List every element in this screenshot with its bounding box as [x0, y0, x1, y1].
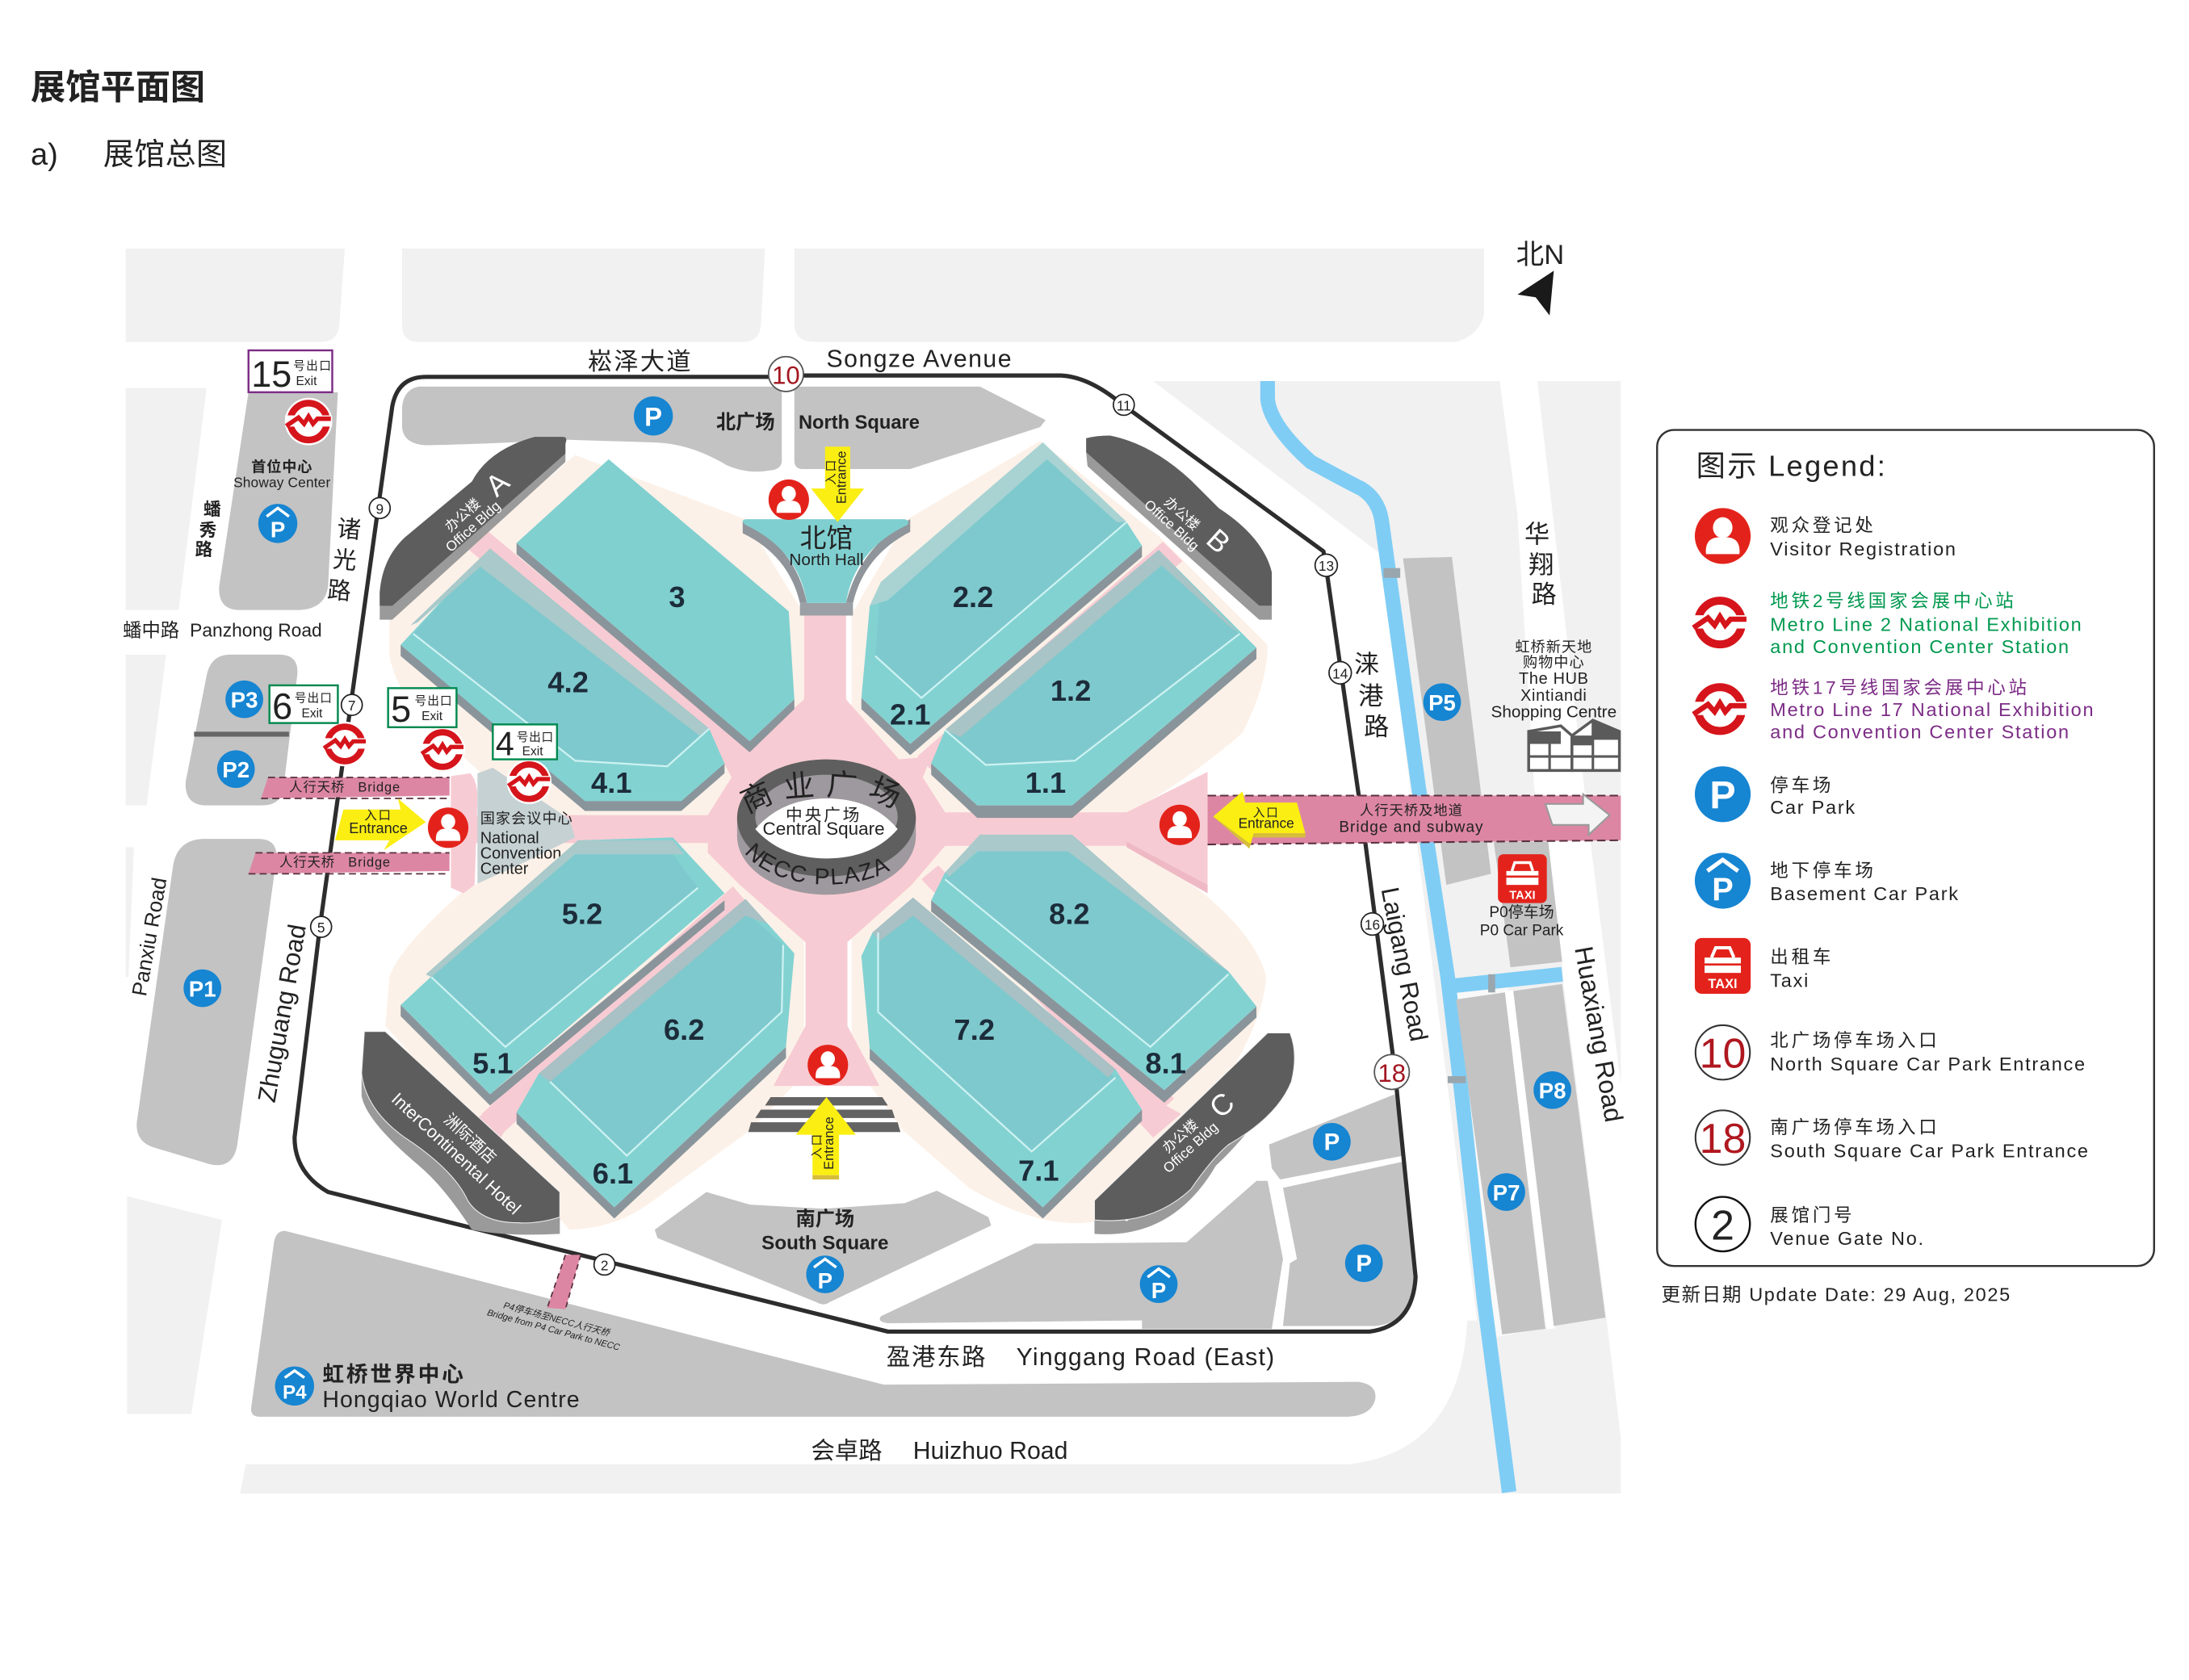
Office Bldg B: B [1200, 522, 1237, 560]
hall 7.1 and 7.2: 7.2 [954, 1013, 995, 1046]
SW corridor [481, 886, 751, 1133]
parking markers: P4 [283, 1381, 307, 1403]
gap between P7 and P8 [1446, 984, 1553, 1337]
legend: visitor registration: 观众登记处 [1770, 516, 1877, 536]
road and place labels: 诸 [336, 515, 362, 544]
legend: metro line 17: 地铁17号线国家会展中心站 [1770, 677, 2030, 698]
National Convention Center: Center [480, 860, 529, 878]
entrance arrow south [796, 1097, 856, 1179]
gate number markers: 7 [348, 698, 356, 714]
road and place labels: Shopping Centre [1491, 703, 1617, 722]
visitor registration icons [428, 480, 1200, 1085]
hall 2.1 and 2.2: 2.1 [890, 698, 931, 731]
legend: taxi [1695, 938, 1834, 994]
legend: north square entrance: 北广场停车场入口 [1770, 1031, 1940, 1051]
National Convention Center: Convention [480, 844, 561, 862]
road and place labels: 港 [1358, 682, 1383, 710]
parking markers: P5 [1428, 690, 1456, 715]
river [1268, 381, 1562, 1492]
legend: taxi: 出租车 [1770, 947, 1834, 967]
legend: taxi: TAXI [1708, 977, 1738, 991]
exit sign 5: Exit [421, 710, 443, 723]
P8 strip [1513, 984, 1605, 1326]
road and place labels [123, 346, 1629, 1464]
lower west bridge: 人行天桥 Bridge [279, 856, 391, 870]
legend: taxi: Taxi [1770, 970, 1809, 991]
parking markers: P2 [222, 757, 250, 782]
Office Bldg B: Office Bldg [1141, 496, 1202, 554]
hall 2.1 and 2.2: 2.2 [953, 580, 993, 614]
Central Square label: Central Square [763, 819, 885, 839]
SE link patch [1115, 1078, 1181, 1137]
east bridge and subway: Bridge and subway [1339, 819, 1484, 836]
road and place labels: P0停车场 [1489, 903, 1554, 921]
exit sign 5 [388, 688, 456, 730]
road and place labels: Yinggang Road (East) [1017, 1344, 1275, 1371]
legend: car park: 停车场 [1770, 775, 1834, 795]
east car park upper [1269, 1095, 1403, 1179]
P2 P3 block [186, 655, 297, 806]
venue forecourt background [385, 441, 1268, 1230]
Office Bldg C: C [1203, 1086, 1241, 1125]
hall 3 [517, 459, 795, 752]
P0 strip [1494, 842, 1562, 967]
legend: metro line 2 [1692, 591, 2082, 657]
Office Bldg B: 办公楼 [1161, 493, 1203, 534]
legend: basement car park: Basement Car Park [1770, 883, 1960, 904]
hall 1.1 and 1.2 [931, 550, 1256, 818]
hall 2.1 and 2.2 [862, 442, 1142, 755]
exit sign 6: Exit [301, 707, 323, 721]
road and place labels: 路 [326, 577, 352, 605]
exit sign 4: 4 [496, 724, 514, 762]
road and place labels: North Square [799, 413, 920, 434]
section heading: a) [31, 138, 58, 172]
hall 8.1 and 8.2 [931, 835, 1256, 1103]
entrance arrow north: 入口 [825, 459, 838, 485]
road and place labels: Huizhuo Road [913, 1438, 1067, 1464]
road and place labels: 路 [195, 539, 213, 559]
legend: venue gate: Venue Gate No. [1770, 1228, 1925, 1249]
legend: car park: P [1709, 773, 1736, 817]
east car park lower [1283, 1162, 1415, 1326]
exit sign 15: 号出口 [293, 359, 332, 373]
hall 1.1 and 1.2: 1.1 [1025, 766, 1066, 799]
road and place labels: 路 [1364, 713, 1389, 741]
legend: metro line 2: 地铁2号线国家会展中心站 [1770, 591, 2017, 611]
road and place labels: South Square [761, 1232, 888, 1254]
upper west bridge: 人行天桥 Bridge [289, 780, 400, 794]
legend panel [1657, 430, 2154, 1266]
exit sign 15: Exit [296, 375, 317, 388]
gate number markers: 9 [375, 501, 384, 517]
legend: basement car park: P [1712, 872, 1734, 907]
hall 7.1 and 7.2: 7.1 [1018, 1154, 1059, 1188]
entrance arrow east: Entrance [1239, 815, 1294, 831]
north arrow: 北N [1516, 240, 1564, 270]
parking markers: P [818, 1268, 832, 1293]
Office Bldg A: 办公楼 [442, 495, 484, 535]
legend: metro line 2: and Convention Center Station [1770, 636, 2070, 657]
entrance arrow east: 入口 [1253, 806, 1280, 819]
legend: south square entrance: South Square Car Park Entrance [1770, 1140, 2090, 1161]
Office Bldg C [1095, 1033, 1294, 1234]
InterContinental Hotel: InterContinental Hotel [388, 1088, 525, 1218]
National Convention Center: National [480, 829, 539, 847]
SW link patch [477, 1074, 539, 1139]
P7 strip [1456, 992, 1545, 1334]
road and place labels: Songze Avenue [827, 346, 1013, 373]
gate number markers: 18 [1378, 1059, 1406, 1087]
P1 block [136, 839, 276, 1165]
National Convention Center [477, 768, 575, 883]
exit sign 15 [249, 350, 332, 395]
exit sign 6 [270, 685, 338, 727]
entrance arrow north [811, 446, 864, 522]
road and place labels: 北广场 [716, 412, 775, 434]
NW corridor [469, 532, 754, 772]
parking markers [183, 396, 1571, 1406]
P4 link bridge: Bridge from P4 Car Park to NECC [486, 1308, 622, 1353]
road and place labels: 秀 [199, 520, 217, 540]
gate number markers [311, 357, 1409, 1275]
exit sign 5: 号出口 [414, 694, 453, 708]
Office Bldg A: Office Bldg [442, 497, 504, 555]
legend: car park: Car Park [1770, 797, 1856, 818]
entrance arrow east [1213, 791, 1306, 848]
P2 P3 divider [194, 733, 289, 735]
hall 1.1 and 1.2: 1.2 [1050, 674, 1091, 707]
north arrow [1516, 240, 1564, 316]
hall 8.1 and 8.2: 8.1 [1145, 1047, 1186, 1080]
taxi icon on map: TAXI [1509, 889, 1536, 902]
road and place labels: 蟠 [203, 499, 221, 519]
road and place labels: 虹桥新天地 [1515, 639, 1592, 655]
exit sign 5: 5 [391, 689, 411, 730]
central plaza ring [736, 759, 916, 894]
North Square east [795, 387, 1046, 469]
entrance arrow west [335, 798, 426, 850]
white arrow [1545, 794, 1609, 835]
legend title: 图示 Legend: [1696, 450, 1887, 483]
hall 8.1 and 8.2: 8.2 [1049, 898, 1090, 931]
hall 7.1 and 7.2 [862, 898, 1142, 1218]
road and place labels: 华 [1524, 521, 1549, 549]
river crossings [1383, 568, 1495, 1083]
road and place labels: 路 [1532, 580, 1557, 609]
exit sign 6: 号出口 [295, 692, 333, 706]
Office Bldg B [1086, 435, 1272, 620]
hall 4.1 and 4.2 [400, 548, 724, 811]
entrance arrow west: 入口 [364, 809, 392, 823]
parking markers: P [1356, 1251, 1372, 1277]
pink corridors [451, 532, 1208, 1139]
parking markers: P8 [1539, 1079, 1566, 1104]
legend: south square entrance: 南广场停车场入口 [1770, 1117, 1940, 1137]
exit sign 6: 6 [272, 685, 292, 727]
update date: 更新日期 Update Date: 29 Aug, 2025 [1661, 1284, 2011, 1305]
Office Bldg C: Office Bldg [1159, 1119, 1221, 1176]
North Square west [402, 387, 782, 471]
road and place labels: 涞 [1354, 650, 1379, 678]
gate number markers: 11 [1117, 397, 1131, 413]
parking markers: P [644, 401, 662, 431]
road and place labels: 会卓路 [811, 1438, 883, 1464]
P4 link bridge: P4停车场至NECC人行天桥 [502, 1300, 612, 1339]
legend: south square entrance [1696, 1110, 2090, 1165]
legend: south square entrance: 18 [1700, 1115, 1746, 1162]
hall 5.1 and 5.2 [400, 837, 724, 1105]
Office Bldg A: A [479, 464, 516, 503]
HUB building icon [1529, 720, 1620, 770]
exit sign 15: 15 [251, 354, 291, 395]
road and place labels: 翔 [1529, 551, 1554, 580]
legend: basement car park: 地下停车场 [1770, 861, 1877, 881]
legend: north square entrance [1696, 1025, 2086, 1079]
metro icons on map [285, 398, 551, 804]
legend: north square entrance: North Square Car Park Entrance [1770, 1054, 2086, 1075]
hall 6.1 and 6.2: 6.2 [664, 1013, 704, 1046]
east bridge and subway [1208, 794, 1621, 844]
legend: venue gate [1696, 1197, 1925, 1251]
road and place labels: 蟠中路 [123, 619, 179, 640]
hall 6.1 and 6.2 [517, 899, 795, 1218]
road and place labels: 盈港东路 [887, 1344, 987, 1371]
corridor shadow east [1126, 842, 1208, 894]
Huaxiang road surface [1499, 379, 1621, 1438]
ring text Chinese: 商业广场 [740, 770, 900, 814]
background city blocks [126, 249, 1621, 1494]
parking markers: P [270, 517, 285, 543]
entrance arrow south: Entrance [822, 1117, 837, 1170]
parking markers: P [1151, 1278, 1166, 1303]
taxi icon on map [1498, 854, 1547, 903]
road and place labels: Panzhong Road [190, 619, 322, 640]
road and place labels: Hongqiao World Centre [322, 1387, 581, 1413]
road and place labels: Showay Center [233, 474, 330, 490]
legend: basement car park [1695, 853, 1960, 909]
road and place labels: 光 [332, 546, 358, 575]
gate number markers: 14 [1332, 665, 1348, 681]
hall 4.1 and 4.2: 4.2 [547, 666, 589, 699]
road and place labels: P0 Car Park [1480, 922, 1564, 939]
Central Square label [763, 806, 885, 839]
entrance arrow north: Entrance [835, 450, 849, 504]
ring text English: NECC PLAZA [745, 843, 891, 885]
south entrance stairs [749, 1097, 900, 1132]
hall 5.1 and 5.2: 5.2 [562, 898, 602, 931]
legend: venue gate: 2 [1711, 1201, 1734, 1248]
hall 5.1 and 5.2: 5.1 [472, 1047, 514, 1080]
legend: venue gate: 展馆门号 [1770, 1205, 1855, 1225]
gate number markers: 2 [601, 1257, 608, 1273]
hall 4.1 and 4.2: 4.1 [591, 766, 632, 799]
gate number markers: 13 [1319, 558, 1334, 574]
road and place labels: The HUB [1519, 670, 1589, 688]
legend: metro line 17: and Convention Center Station [1770, 722, 2070, 743]
Office Bldg A [380, 437, 566, 620]
InterContinental Hotel: 洲际酒店 [440, 1111, 499, 1167]
parking markers: P1 [189, 976, 216, 1001]
Office Bldg C: 办公楼 [1159, 1117, 1201, 1156]
SE corridor [921, 865, 1174, 1120]
venue ring road [295, 375, 1415, 1331]
road and place labels: 崧泽大道 [588, 348, 693, 375]
section heading [31, 138, 227, 172]
NE corridor [917, 542, 1182, 776]
road and place labels: Laigang Road [1376, 885, 1433, 1044]
road and place labels: 虹桥世界中心 [322, 1363, 466, 1387]
South Square [655, 1191, 992, 1305]
central concourse [572, 615, 1208, 1086]
page title: 展馆平面图 [31, 69, 205, 107]
road and place labels: Zhuguang Road [253, 922, 312, 1104]
entrance arrow west: Entrance [349, 820, 408, 836]
upper west bridge [261, 777, 450, 798]
lower west bridge [249, 853, 450, 874]
east bridge and subway: 人行天桥及地道 [1360, 802, 1463, 819]
road and place labels: Xintiandi [1520, 687, 1587, 705]
North Hall [743, 519, 910, 615]
Showay Center block [219, 392, 338, 610]
road and place labels: 南广场 [796, 1209, 854, 1230]
legend: metro line 17 [1692, 677, 2095, 743]
North Hall: 北馆 [800, 523, 853, 553]
exit sign 4: Exit [522, 744, 543, 758]
road and place labels: 首位中心 [251, 458, 312, 475]
legend: car park [1695, 766, 1856, 822]
gate number markers: 16 [1365, 916, 1380, 932]
legend: visitor registration [1695, 508, 1957, 564]
parking markers: P [1324, 1129, 1340, 1156]
gate number markers: 5 [317, 920, 325, 936]
west entrance strip [451, 773, 477, 894]
InterContinental Hotel [362, 1032, 560, 1234]
parking markers: P7 [1493, 1180, 1520, 1205]
south-east car park [880, 1181, 1283, 1329]
North Hall: North Hall [789, 551, 864, 569]
parking markers: P3 [231, 688, 258, 713]
hall 6.1 and 6.2: 6.1 [593, 1157, 633, 1190]
road and place labels: Panxiu Road [128, 876, 171, 998]
exit sign 4 [493, 724, 557, 762]
section heading: 展馆总图 [103, 138, 227, 172]
P4 link bridge [486, 1255, 625, 1353]
legend: metro line 2: Metro Line 2 National Exhibition [1770, 614, 2082, 635]
Hongqiao World Centre block [251, 1231, 1375, 1417]
gate number markers: 10 [772, 361, 800, 389]
legend: visitor registration: Visitor Registration [1770, 538, 1957, 559]
road and place labels: Huaxiang Road [1569, 944, 1629, 1125]
exit sign 4: 号出口 [517, 731, 554, 744]
Central Square label: 中央广场 [786, 806, 862, 825]
entrance arrow south: 入口 [811, 1133, 824, 1159]
legend: north square entrance: 10 [1700, 1030, 1746, 1077]
P5 strip [1403, 557, 1491, 885]
National Convention Center: 国家会议中心 [480, 811, 573, 827]
road and place labels: 购物中心 [1523, 654, 1585, 670]
car parks and squares [136, 387, 1605, 1417]
hall 3: 3 [669, 580, 686, 614]
legend: metro line 17: Metro Line 17 National Exhibition [1770, 699, 2095, 720]
